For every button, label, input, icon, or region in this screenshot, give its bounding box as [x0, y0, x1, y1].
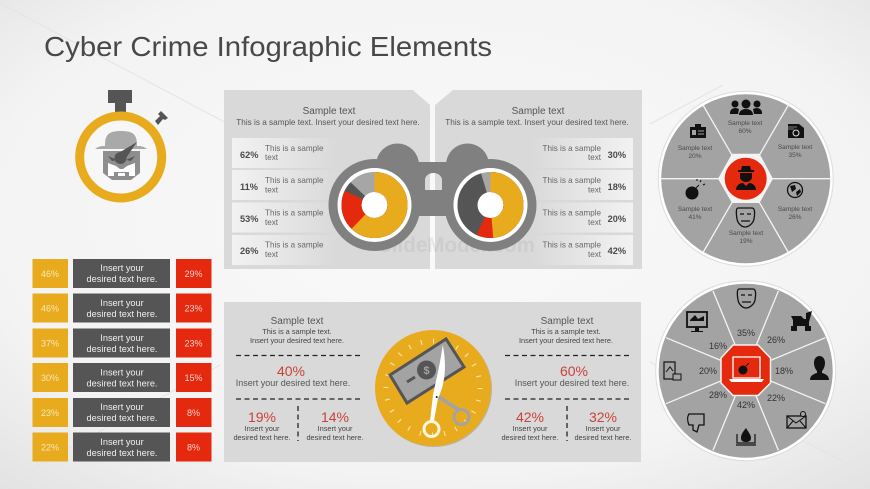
column: yellow percentages — [32, 259, 68, 462]
column: yellow percentages: 37% — [41, 338, 59, 348]
panel: money stats: Insert your — [513, 424, 547, 433]
chart: right donut — [468, 182, 514, 228]
title: Cyber Crime Infographic Elements — [44, 31, 492, 62]
panel: binoculars right: text — [588, 250, 602, 259]
panel: money stats: This is a sample text. — [531, 327, 601, 336]
labels: segment text: 26% — [788, 214, 802, 221]
icon: document search — [788, 124, 804, 138]
column: red percentages: 23% — [184, 304, 203, 314]
icon: monitor — [687, 312, 707, 332]
icon: scissors cutting money: $ — [423, 365, 430, 377]
labels: segment text: 35% — [788, 152, 802, 159]
icon: user — [810, 356, 829, 380]
panel: binoculars right — [435, 90, 642, 269]
labels: percentages — [699, 328, 793, 410]
icon: bomb — [686, 179, 705, 200]
column: yellow percentages: 46% — [41, 269, 59, 279]
panel: binoculars right: This is a sample — [543, 176, 601, 185]
column: grey descriptions: Insert your — [100, 437, 144, 447]
icon: envelope — [787, 412, 806, 428]
labels: segment text: Sample text — [728, 120, 762, 127]
column: grey descriptions: Insert your — [100, 368, 144, 378]
column: yellow percentages: 22% — [41, 442, 59, 452]
labels: percentages: 16% — [709, 341, 727, 351]
panel: binoculars left: text — [265, 186, 279, 194]
column: grey descriptions: desired text here. — [86, 309, 158, 319]
labels: segment text: 20% — [688, 153, 702, 160]
chart: left donut — [352, 182, 398, 228]
column: grey descriptions: desired text here. — [86, 274, 158, 284]
panel: money stats: desired text here. — [306, 433, 364, 442]
column: red percentages: 8% — [187, 442, 200, 452]
panel: binoculars left — [224, 90, 430, 269]
panel: money stats: Insert your desired text here. — [250, 336, 344, 345]
labels: percentages: 18% — [775, 366, 793, 376]
panel: money stats: Insert your — [318, 424, 352, 433]
column: red percentages — [176, 259, 212, 462]
column: yellow percentages: 23% — [41, 408, 59, 418]
panel: money stats: Insert your — [245, 424, 279, 433]
icon: thumbs down — [688, 414, 704, 432]
text: left heading: Sample text — [271, 316, 324, 327]
column: grey descriptions: desired text here. — [86, 448, 158, 458]
heading: right binocular panel: Sample text — [512, 106, 565, 117]
panel: binoculars left: This is a sample — [265, 208, 324, 218]
panel: binoculars right: 20% — [608, 214, 626, 224]
panel: binoculars left: 53% — [240, 214, 258, 224]
icon: trojan horse — [791, 311, 812, 331]
panel: money stats: desired text here. — [574, 433, 632, 442]
panel: money stats: Insert your — [586, 424, 620, 433]
icon: water drop on laptop — [736, 428, 756, 445]
icon: scissors cutting money — [375, 330, 492, 447]
panel: binoculars left: This is a sample — [265, 240, 324, 250]
hexagon wheel — [658, 91, 833, 266]
panel: binoculars left: 26% — [240, 246, 258, 256]
column: grey descriptions: desired text here. — [86, 344, 158, 354]
octagon wheel — [656, 281, 836, 461]
column: yellow percentages: 46% — [41, 304, 59, 314]
panel: binoculars left: 62% — [240, 150, 258, 160]
labels: segment text: Sample text — [678, 145, 712, 152]
icon: stopwatch with hacker — [80, 90, 168, 198]
panel: money stats: desired text here. — [501, 433, 559, 442]
panel: binoculars right: This is a sample — [543, 144, 601, 153]
panel: binoculars left: 11% — [240, 182, 258, 192]
stat: 40 percent: 40% — [277, 363, 305, 379]
column: yellow percentages: 30% — [41, 373, 59, 383]
labels: percentages: 42% — [737, 400, 755, 410]
labels: segment text: 41% — [688, 214, 702, 221]
panel: binoculars right: text — [588, 186, 602, 194]
panel: money stats: desired text here. — [233, 433, 291, 442]
icon: binoculars with donut charts — [328, 144, 536, 251]
column: red percentages: 15% — [184, 373, 203, 383]
icon: globe — [788, 182, 802, 198]
panel: money stats — [224, 302, 641, 462]
column: red percentages: 29% — [184, 269, 203, 279]
icon: mask — [736, 208, 755, 227]
stat: 19 percent: 19% — [248, 409, 276, 425]
column: grey descriptions: Insert your — [100, 402, 144, 412]
column: grey descriptions — [73, 259, 170, 462]
icon: id card — [690, 124, 706, 138]
panel: binoculars right: This is a sample — [543, 240, 601, 250]
column: red percentages: 23% — [184, 338, 203, 348]
icon: people — [730, 100, 762, 115]
panel: money stats: Insert your desired text here. — [236, 378, 350, 388]
panel: binoculars right: text — [588, 153, 602, 162]
labels: segment text: Sample text — [678, 206, 712, 213]
labels: segment text: Sample text — [778, 144, 812, 151]
column: red percentages: 8% — [187, 408, 200, 418]
panel: binoculars right: This is a sample text. Insert your desired text here. — [445, 118, 629, 127]
column: grey descriptions: Insert your — [100, 298, 144, 308]
labels: segment text: 60% — [738, 128, 752, 135]
panel: money stats: Insert your desired text here. — [515, 378, 629, 388]
labels: percentages: 20% — [699, 366, 717, 376]
panel: binoculars right: 42% — [608, 246, 626, 256]
stat: 60 percent: 60% — [560, 363, 588, 379]
panel: binoculars left: This is a sample — [265, 144, 324, 153]
column: grey descriptions: Insert your — [100, 263, 144, 273]
labels: percentages: 35% — [737, 328, 755, 338]
watermark: SlideModel.com — [378, 234, 535, 257]
labels: segment text: Sample text — [729, 230, 763, 237]
panel: binoculars left: text — [265, 153, 279, 162]
icon: laptop bomb — [729, 357, 764, 382]
panel: binoculars left: text — [265, 218, 279, 227]
labels: segment text: 19% — [739, 238, 753, 245]
labels: segment text: Sample text — [778, 206, 812, 213]
column: grey descriptions: Insert your — [100, 333, 144, 343]
icon: hacker — [736, 166, 756, 190]
panel: binoculars left: This is a sample — [265, 176, 324, 185]
stat: 32 percent: 32% — [589, 409, 617, 425]
labels: percentages: 26% — [767, 335, 785, 345]
panel: binoculars right: text — [588, 218, 602, 227]
heading: left binocular panel: Sample text — [303, 106, 356, 117]
column: grey descriptions: desired text here. — [86, 378, 158, 388]
panel: money stats: This is a sample text. — [262, 327, 332, 336]
labels: segment text — [678, 120, 812, 245]
icon: mask — [737, 289, 756, 308]
panel: binoculars right: 18% — [608, 182, 626, 192]
panel: money stats: Insert your desired text here. — [519, 336, 613, 345]
icon: image with chat — [664, 362, 681, 380]
text: right heading: Sample text — [541, 316, 594, 327]
labels: percentages: 28% — [709, 390, 727, 400]
table: left stats — [32, 259, 212, 462]
panel: binoculars left: This is a sample text. Insert your desired text here. — [236, 118, 420, 127]
panel: binoculars left: text — [265, 250, 279, 259]
panel: binoculars right: This is a sample — [543, 208, 601, 218]
labels: percentages: 22% — [767, 393, 785, 403]
panel: binoculars right: 30% — [608, 150, 626, 160]
stat: 42 percent: 42% — [516, 409, 544, 425]
stat: 14 percent: 14% — [321, 409, 349, 425]
column: grey descriptions: desired text here. — [86, 413, 158, 423]
